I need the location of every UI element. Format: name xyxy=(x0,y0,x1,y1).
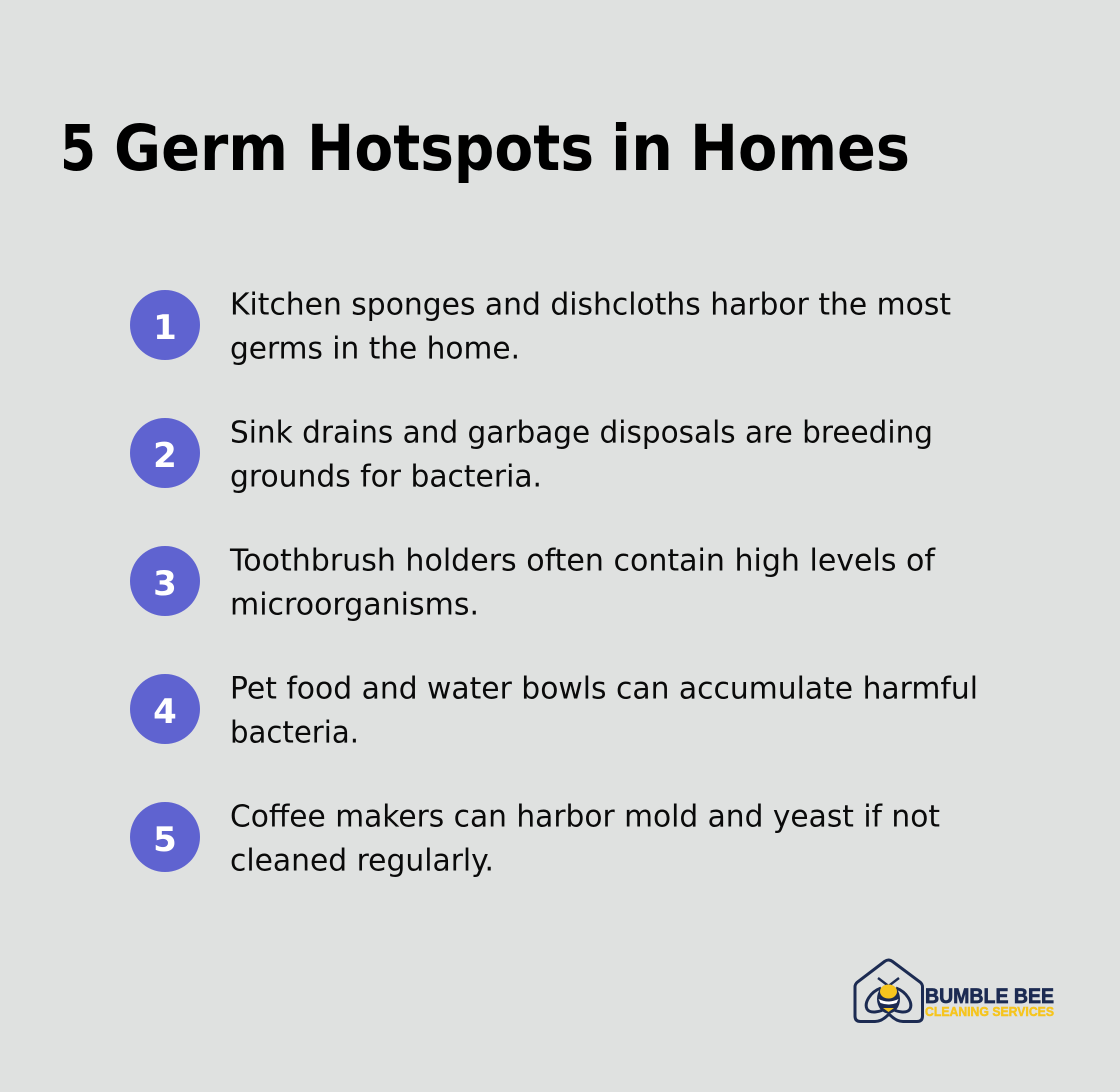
item 5 text xyxy=(230,800,940,878)
item 4 text xyxy=(230,672,978,750)
icon: house with bee xyxy=(855,960,922,1022)
number badge 3 xyxy=(130,546,200,616)
item 4 text: bacteria. xyxy=(230,716,359,750)
number badge 4: 4 xyxy=(153,692,177,732)
logo: Bumble Bee Cleaning Services xyxy=(855,960,1054,1022)
number badge 3: 3 xyxy=(153,564,177,604)
number badge 2 xyxy=(130,418,200,488)
item 1 text: Kitchen sponges and dishcloths harbor the most xyxy=(230,288,951,322)
list item 1 xyxy=(130,288,951,366)
number badge 1: 1 xyxy=(153,308,177,348)
item 4 text: Pet food and water bowls can accumulate harmful xyxy=(230,672,978,706)
item 5 text: cleaned regularly. xyxy=(230,844,494,878)
item 3 text: microorganisms. xyxy=(230,588,479,622)
item 2 text xyxy=(230,416,933,494)
title: Hotspots xyxy=(307,112,594,185)
number badge 4 xyxy=(130,674,200,744)
title: Germ xyxy=(114,112,288,185)
number badge 1 xyxy=(130,290,200,360)
item 2 text: grounds for bacteria. xyxy=(230,460,542,494)
list item 2 xyxy=(130,416,933,494)
list item 4 xyxy=(130,672,978,750)
item 3 text: Toothbrush holders often contain high levels of xyxy=(229,544,936,578)
logo wordmark: BUMBLE BEE xyxy=(925,985,1054,1008)
title: 5 xyxy=(60,112,96,185)
item 5 text: Coffee makers can harbor mold and yeast if not xyxy=(230,800,940,834)
title: in xyxy=(611,112,673,185)
number badge 5 xyxy=(130,802,200,872)
logo tagline: CLEANING SERVICES xyxy=(925,1004,1054,1019)
list item 5 xyxy=(130,800,940,878)
list item 3 xyxy=(130,544,936,622)
number badge 5: 5 xyxy=(153,820,177,860)
item 1 text xyxy=(230,288,951,366)
item 3 text xyxy=(229,544,936,622)
title xyxy=(60,112,910,185)
number badge 2: 2 xyxy=(153,436,177,476)
item 2 text: Sink drains and garbage disposals are breeding xyxy=(230,416,933,450)
item 1 text: germs in the home. xyxy=(230,332,520,366)
title: Homes xyxy=(690,112,910,185)
